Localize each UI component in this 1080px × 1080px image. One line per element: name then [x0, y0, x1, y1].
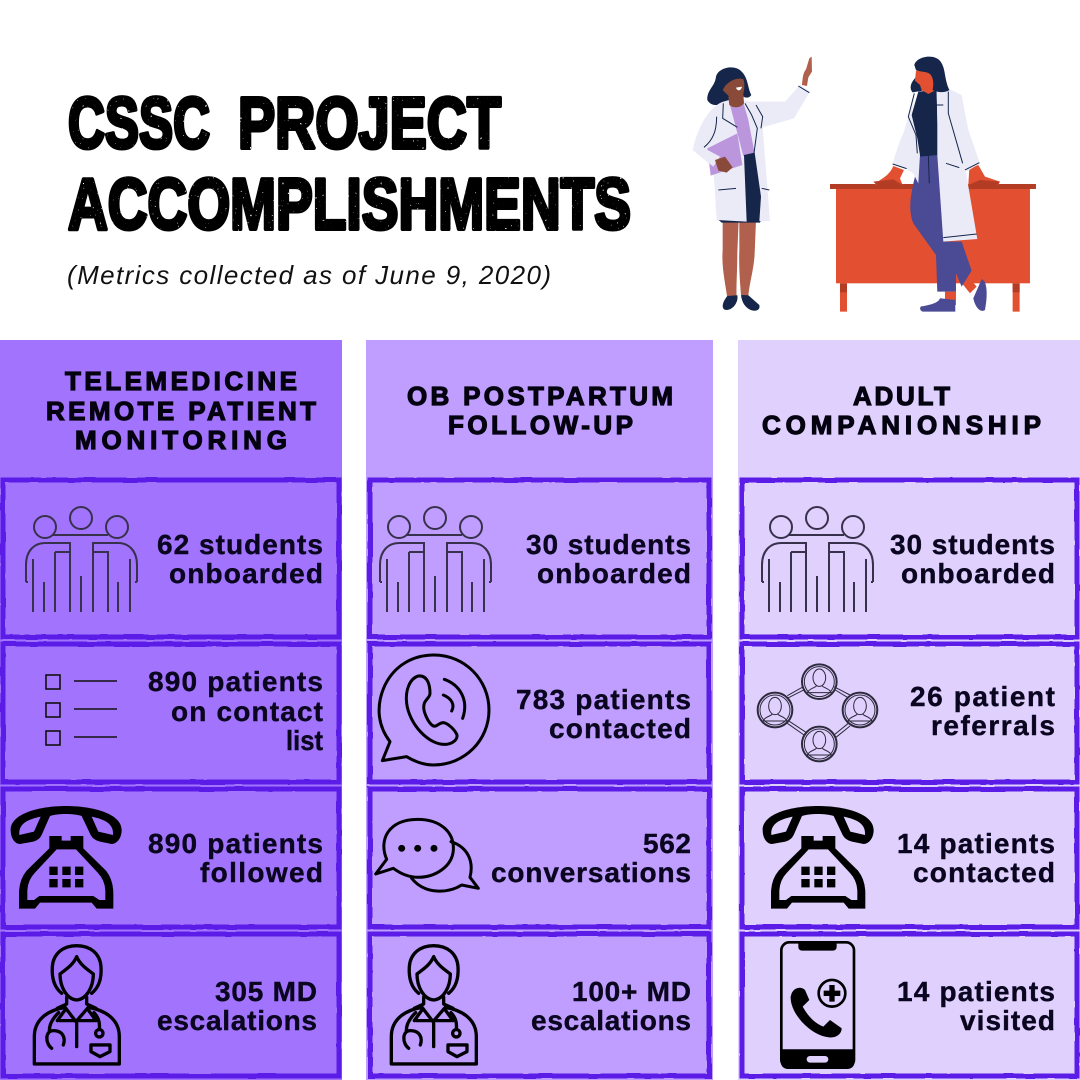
text: 30 students onboarded: 30 students [526, 529, 691, 560]
icon: checklist [46, 675, 117, 745]
heading: adult companionship: COMPANIONSHIP [762, 410, 1041, 440]
card: 14 patients visited [742, 934, 1077, 1076]
heading: OB postpartum follow-up: OB POSTPARTUM [407, 381, 673, 411]
icon: chat bubbles [376, 819, 478, 891]
icon: students group [26, 507, 137, 612]
title: ACCOMPLISHMENTS [68, 165, 631, 245]
text: 562 conversations: conversations [491, 857, 691, 888]
subtitle: (Metrics collected as of June 9, 2020) [67, 260, 551, 290]
text: 30 students onboarded: onboarded [901, 558, 1055, 589]
icon: doctor [391, 946, 476, 1064]
card: 100+ MD escalations [370, 934, 709, 1076]
heading: telemedicine: REMOTE PATIENT [46, 396, 316, 426]
text: 14 patients visited: visited [960, 1005, 1055, 1036]
text: 62 students onboarded [157, 529, 323, 589]
text: 890 patients on contact list: list [286, 725, 323, 756]
text: 783 patients contacted: contacted [549, 713, 691, 744]
text: 890 patients followed: 890 patients [148, 828, 323, 859]
panel: telemedicine column [0, 340, 342, 1080]
text: 783 patients contacted [516, 684, 691, 744]
panel: OB postpartum column [366, 340, 713, 1080]
card: 26 patient referrals [742, 644, 1077, 782]
card: 890 patients on contact list [3, 644, 339, 782]
icon: students group [380, 507, 491, 612]
text: 26 patient referrals: 26 patient [910, 681, 1055, 712]
text: 890 patients on contact list: on contact [171, 696, 323, 727]
text: 62 students onboarded: 62 students [157, 529, 323, 560]
heading: OB postpartum follow-up: FOLLOW-UP [448, 410, 633, 440]
text: 562 conversations: 562 [643, 828, 691, 859]
text: 26 patient referrals [910, 681, 1055, 741]
icon: referral network [758, 664, 877, 761]
heading: telemedicine: MONITORING [75, 425, 287, 455]
heading: adult companionship: ADULT [853, 381, 950, 411]
text: 783 patients contacted: 783 patients [516, 684, 691, 715]
text: 562 conversations [491, 828, 691, 888]
title: CSSC [68, 84, 210, 164]
text: 100+ MD escalations [531, 976, 691, 1036]
text: 30 students onboarded: 30 students [890, 529, 1055, 560]
text: 305 MD escalations: 305 MD [215, 976, 317, 1007]
illustration: doctor waving [693, 57, 812, 311]
text: 30 students onboarded [526, 529, 691, 589]
text: 890 patients on contact list [148, 666, 323, 756]
card: 562 conversations [370, 789, 709, 927]
card: 30 students onboarded [742, 480, 1077, 637]
card: 783 patients contacted [370, 644, 709, 782]
text: 62 students onboarded: onboarded [169, 558, 323, 589]
desk [830, 184, 1036, 312]
text: 14 patients contacted [897, 828, 1055, 888]
text: 14 patients visited [897, 976, 1055, 1036]
icon: mobile phone with medical call [781, 942, 855, 1069]
heading: telemedicine [46, 366, 316, 455]
card: 890 patients followed [3, 789, 339, 927]
text: 305 MD escalations [157, 976, 317, 1036]
text: 30 students onboarded [890, 529, 1055, 589]
text: 100+ MD escalations: escalations [531, 1005, 691, 1036]
card: 14 patients contacted [742, 789, 1077, 927]
text: 30 students onboarded: onboarded [537, 558, 691, 589]
panel: adult companionship column [738, 340, 1080, 1080]
heading: telemedicine: TELEMEDICINE [65, 366, 297, 396]
text: 890 patients followed [148, 828, 323, 888]
title: PROJECT [238, 84, 501, 164]
text: 14 patients visited: 14 patients [897, 976, 1055, 1007]
icon: telephone [763, 806, 874, 909]
text: 305 MD escalations: escalations [157, 1005, 317, 1036]
heading: OB postpartum follow-up [407, 381, 673, 440]
icon: students group [762, 507, 873, 612]
heading: adult companionship [762, 381, 1041, 440]
text: 890 patients on contact list: 890 patients [148, 666, 323, 697]
icon: doctor [34, 946, 119, 1064]
text: 26 patient referrals: referrals [931, 710, 1055, 741]
text: 14 patients contacted: 14 patients [897, 828, 1055, 859]
icon: telephone [11, 806, 122, 909]
card: 305 MD escalations [3, 934, 339, 1076]
card: 62 students onboarded [3, 480, 339, 637]
icon: phone call speech bubble [379, 655, 489, 765]
text: 100+ MD escalations: 100+ MD [572, 976, 691, 1007]
text: 890 patients followed: followed [200, 857, 323, 888]
card: 30 students onboarded [370, 480, 709, 637]
illustration: doctor leaning on desk [830, 57, 1036, 312]
title [68, 84, 631, 245]
text: 14 patients contacted: contacted [913, 857, 1055, 888]
